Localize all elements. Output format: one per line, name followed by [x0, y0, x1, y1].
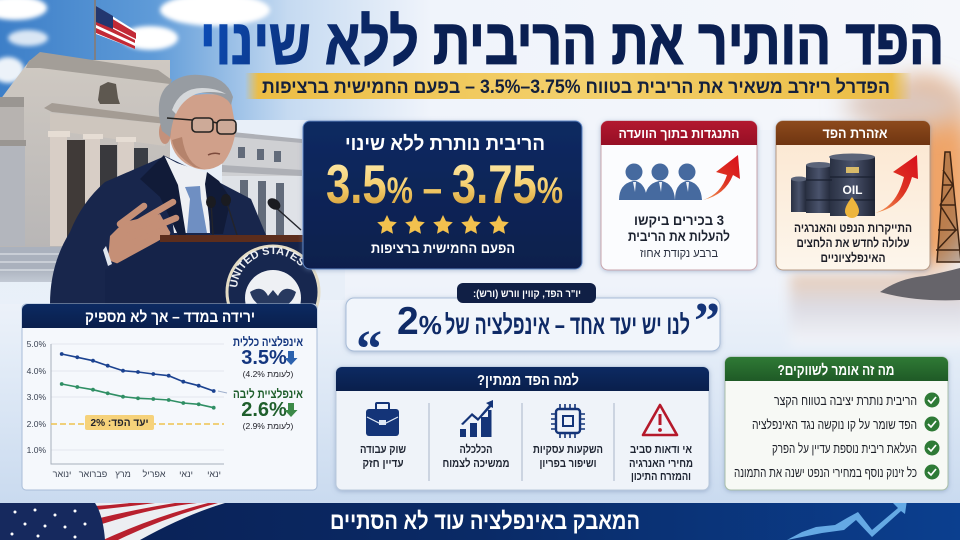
panel: Fed warning [776, 121, 930, 270]
flag on roof [94, 0, 136, 60]
five stars [377, 215, 509, 234]
seal of the Federal Reserve [226, 244, 320, 308]
reason: investment [533, 404, 603, 470]
stat: core inflation: (לעומת 2.9%) [243, 421, 294, 431]
icon: three officials [619, 164, 702, 200]
reason: economy growing: ממשיכה לצמוח [442, 457, 510, 470]
reason: labor market: שוק עבודה [360, 444, 406, 456]
reason: uncertainty [629, 405, 693, 483]
reason: investment: ושיפור בפריון [540, 458, 596, 470]
quote mark left: “ [356, 321, 382, 378]
icon: rising red arrow [875, 155, 918, 213]
background: sunset haze [790, 80, 960, 346]
panel: quote: יו"ר הפד, קווין וורש (ורש): [473, 288, 581, 300]
line chart: 3.0% [27, 392, 46, 402]
warning text: התייקרות הנפט והאנרגיה [794, 221, 912, 235]
background: oil derrick and shore [880, 152, 960, 300]
raised hand [108, 214, 170, 266]
panel: inflation chart [22, 304, 317, 490]
dissent text: 3 בכירים ביקשו [634, 212, 724, 228]
stat: headline inflation: אינפלציה כללית [233, 335, 303, 349]
line chart: ינאי [207, 469, 221, 479]
rate footnote: הפעם החמישית ברציפות [371, 240, 515, 256]
flag graphic [0, 503, 225, 540]
line chart: ינואר [53, 469, 71, 479]
suit [50, 156, 270, 305]
quote mark right: ” [694, 293, 720, 350]
stat: core inflation: אינפלציית ליבה [233, 387, 303, 401]
line chart: 2.0% [27, 419, 46, 429]
quote text: לנו יש יעד אחד – אינפלציה של [445, 310, 690, 340]
rate range numbers: 3.5% – 3.75% [326, 153, 563, 215]
speaker label [457, 283, 596, 303]
reason: investment: השקעות עסקיות [533, 444, 603, 456]
reason: economy growing: הכלכלה [460, 443, 492, 456]
line chart: 4.0% [27, 366, 46, 376]
line chart: אפריל [142, 469, 166, 479]
reason: labor market: עדיין חזק [362, 458, 404, 470]
reason: uncertainty: אי ודאות סביב [630, 444, 692, 456]
shirt and collar [164, 156, 210, 233]
dissent header [601, 121, 757, 145]
stat: headline inflation: (לעומת 4.2%) [243, 369, 294, 379]
warning header [776, 121, 930, 145]
line chart [27, 339, 227, 479]
glasses [192, 118, 236, 134]
reason: uncertainty: והמזרח התיכון [631, 471, 691, 483]
line chart: ינאי [179, 469, 193, 479]
panel: rate held [303, 121, 582, 269]
icon: oil barrels: OIL [842, 183, 862, 197]
panel: inflation chart: ירידה במדד – אך לא מספיק [85, 309, 255, 326]
footer banner [0, 500, 960, 540]
stat: headline inflation: 3.5% [241, 347, 287, 369]
footer text: המאבק באינפלציה עוד לא הסתיים [330, 508, 640, 535]
panel: what it means for markets: מה זה אומר לשווקים? [778, 362, 894, 379]
reason: uncertainty: מחירי האנרגיה [629, 458, 693, 470]
line chart: יעד הפד: 2% [91, 417, 148, 429]
rising market line [787, 500, 907, 540]
panel: committee dissent [601, 121, 757, 270]
why header [336, 367, 709, 391]
panel: Fed warning: עלולה לחדש את הלחצים [796, 236, 910, 250]
panel: committee dissent: התנגדות בתוך הוועדה [618, 126, 740, 141]
tie [185, 186, 207, 233]
markets header [725, 357, 948, 381]
building: Federal Reserve [0, 52, 302, 304]
quote text [397, 300, 690, 343]
panel: why the Fed waits: למה הפד ממתין? [477, 372, 579, 389]
reason: labor market [360, 403, 406, 470]
panel: why the Fed waits [336, 367, 709, 490]
icon: rising arrow [703, 155, 740, 200]
market item 1: הריבית נותרת יציבה בטווח הקצר [774, 393, 917, 408]
panel: committee dissent: ברבע נקודת אחוז [640, 246, 718, 260]
icon: oil barrels [791, 154, 875, 218]
quote text: 2% [397, 300, 442, 343]
reason: economy growing [442, 400, 510, 470]
chart header [22, 304, 317, 328]
market item 3: העלאת ריבית נוספת עדיין על הפרק [772, 441, 917, 456]
market item 2: הפד שומר על קו נוקשה נגד האינפלציה [752, 417, 917, 432]
podium with seal [117, 235, 320, 308]
line chart: מרץ [115, 469, 131, 479]
hair [159, 75, 233, 137]
face [170, 94, 236, 170]
rate heading: הריבית נותרת ללא שינוי [345, 133, 545, 155]
seal of the Federal Reserve: UNITED STATES [230, 246, 303, 287]
panel: what it means for markets [725, 357, 948, 490]
panel: committee dissent: להעלות את הריבית [628, 228, 730, 244]
stat: core inflation [233, 387, 303, 431]
line chart: 5.0% [27, 339, 46, 349]
panel: Fed warning: האינפלציוניים [820, 251, 886, 265]
stat: core inflation: 2.6% [241, 399, 287, 421]
microphones [211, 200, 301, 235]
subtitle banner: הפדרל ריזרב משאיר את הריבית בטווח ⁦3.5%–3.75%⁩ – בפעם החמישית ברציפות [262, 77, 890, 98]
panel: Fed warning: אזהרת הפד [822, 125, 888, 141]
line chart: 1.0% [27, 445, 46, 455]
speaker: Fed chair at podium [50, 75, 301, 305]
line chart: פברואר [79, 469, 107, 479]
panel: quote [346, 283, 720, 378]
stat: headline inflation [233, 335, 303, 379]
